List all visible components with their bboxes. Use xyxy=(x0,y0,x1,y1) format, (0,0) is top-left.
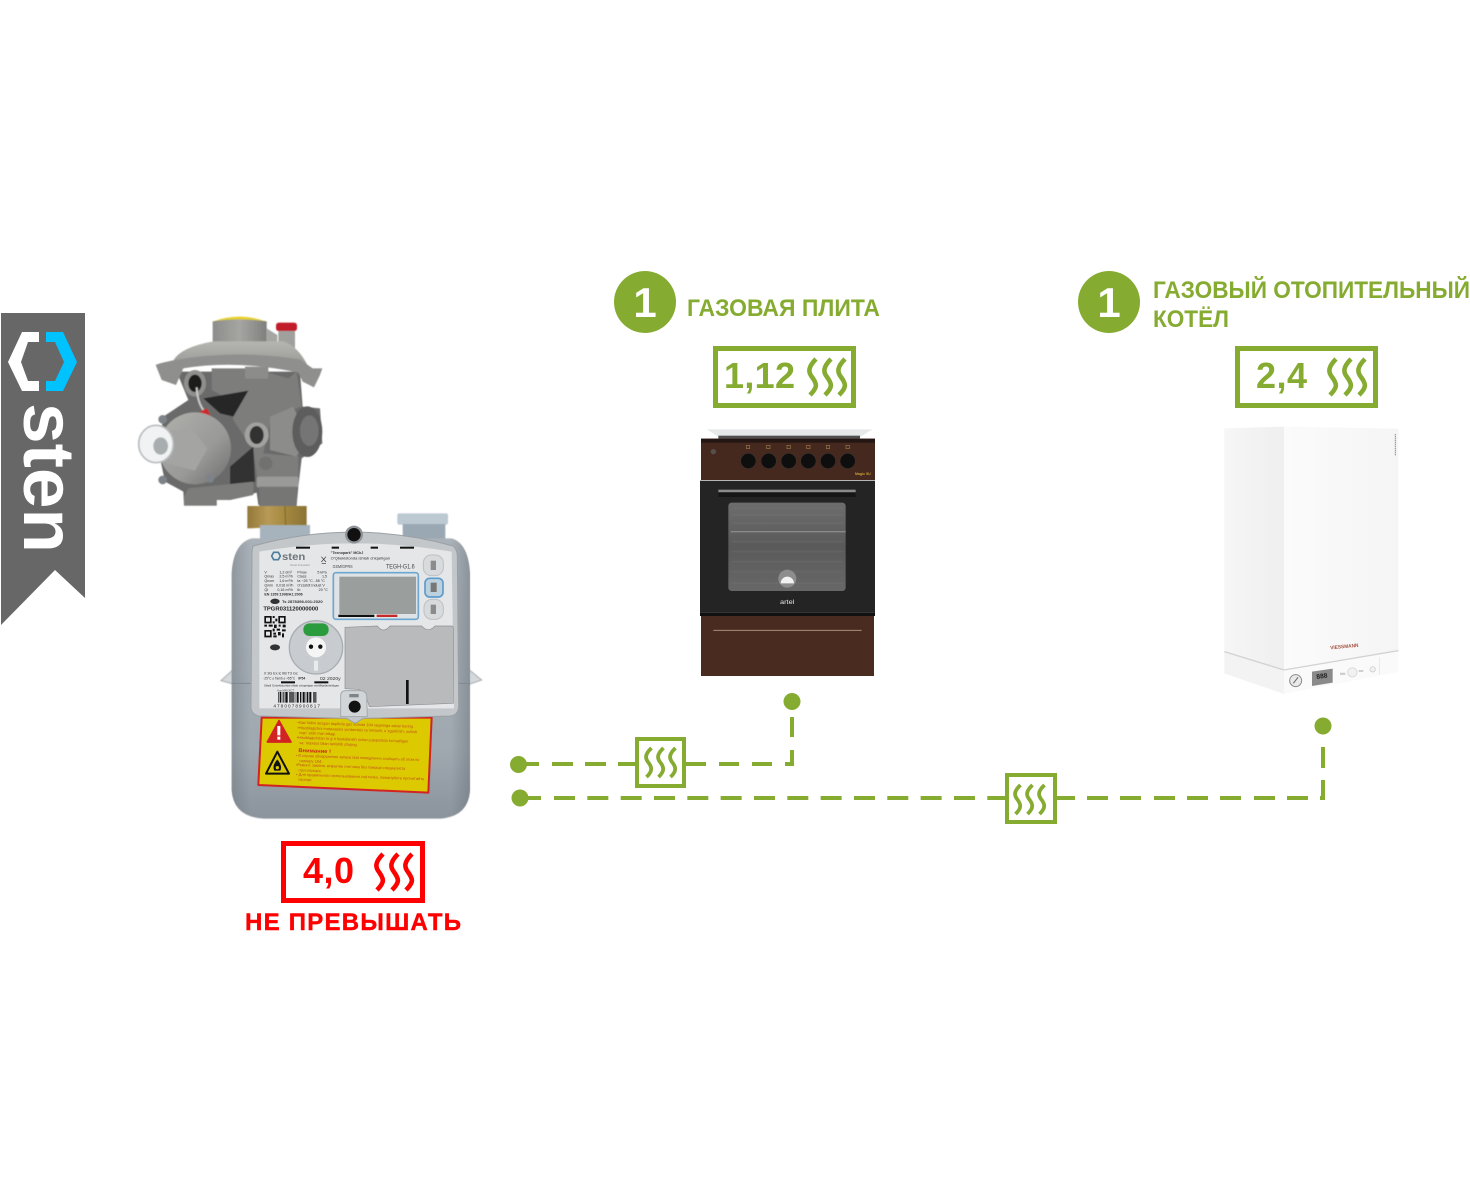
panel: sten mark and title xyxy=(272,551,415,571)
heading: cooker: ГАЗОВАЯ ПЛИТА xyxy=(687,295,880,322)
rating text xyxy=(263,672,341,692)
photo: smart gas meter xyxy=(221,513,482,819)
ribbon: sten logo xyxy=(1,313,88,625)
label text xyxy=(296,721,424,782)
warning caption: НЕ ПРЕВЫШАТЬ xyxy=(245,909,461,936)
barcode: 4780078900817 xyxy=(273,703,320,708)
panel: specification text: 2,5 m³/h xyxy=(279,575,293,579)
control panel xyxy=(701,439,875,480)
hob top xyxy=(707,429,873,437)
panel: specification text: 1,6 m³/h xyxy=(279,579,293,583)
meter: warning label xyxy=(258,718,432,793)
photo: gas pressure regulator xyxy=(139,317,322,528)
index disc xyxy=(289,621,343,674)
panel: specification text: Class xyxy=(297,575,307,579)
label text: строго запрещено. xyxy=(298,768,322,773)
oven door: artel xyxy=(780,600,794,606)
boiler control unit xyxy=(1224,651,1398,694)
badge: boiler quantity xyxy=(1078,271,1140,333)
meter: body shell xyxy=(232,538,470,819)
panel: specification text: 1,2 dm³ xyxy=(279,570,293,574)
value box: cooker 1,12: 1,12 xyxy=(724,355,795,396)
label text: номеру 104. xyxy=(299,759,323,764)
panel: specification text: Qmin xyxy=(264,584,273,588)
drawer xyxy=(700,613,875,676)
panel: specification text: Ts 2878396-001:2020 xyxy=(282,600,323,604)
rating text: IP54 xyxy=(298,676,305,680)
label text: •Hisoblagichdan to`g`ri foydalanish uchun pasportida ko'rsatilgan xyxy=(297,736,408,744)
heading: boiler: КОТЁЛ xyxy=(1153,306,1229,333)
oven door xyxy=(700,481,875,613)
barcode xyxy=(273,697,320,708)
badge: cooker quantity xyxy=(614,271,676,333)
boiler control unit: 888 xyxy=(1316,672,1328,681)
photo: wall-mounted gas boiler xyxy=(1224,427,1398,694)
label text: va `maxsus bilan tanishib chiqing. xyxy=(299,741,358,747)
QR code xyxy=(264,616,286,637)
panel: specification text: Qt xyxy=(264,588,268,592)
rating text: Sifatli Ozbekistonda ishlab chiqarilgan sertifikatlashtirilgan xyxy=(264,684,339,688)
label text: •Ремонт, замена, вскрытие счетчика без помощи специалиста xyxy=(296,763,406,771)
label text: • Для правильного использования счётчика, пожалуйста прочитайте xyxy=(296,773,424,781)
panel: sten mark and title: TEGH-G1.6 xyxy=(386,565,415,571)
logo mark: right blue bracket xyxy=(46,332,77,391)
photo: gas cooker xyxy=(700,429,875,676)
value box: cooker 1,12 xyxy=(716,348,854,406)
label text: man` etish man etilagi. xyxy=(299,731,336,736)
pipe: boiler branch xyxy=(512,718,1332,806)
label text: Внимание ! xyxy=(298,748,331,755)
label text: •Hisoblagichni mutaxassis yordamisiz ta`mirlash, o`zgartirish, ochish xyxy=(297,726,417,734)
heading: boiler xyxy=(1153,276,1470,333)
control panel: Magic 5U xyxy=(855,472,871,476)
logo wordmark: sten xyxy=(8,403,88,553)
panel: sten mark and title: "Texnopark" MChJ xyxy=(331,551,363,555)
panel: specification text: 20 °C xyxy=(319,588,328,592)
panel: specification text: tb xyxy=(297,588,300,592)
buttons xyxy=(423,555,443,619)
meter: front panel: TPGR031120000000 xyxy=(263,607,318,613)
panel: specification text: Qmax xyxy=(264,575,274,579)
label text: •Gaz hidini sezgan taqdirda gaz xizmati 104 raqamiga xabar bering. xyxy=(297,721,414,729)
panel: specification text: 0,016 m³/h xyxy=(276,584,293,588)
panel: specification text: Qnom xyxy=(264,579,274,583)
panel: specification text: 0,16 m³/h xyxy=(277,588,293,592)
warning triangle xyxy=(267,721,291,742)
grey cover xyxy=(345,626,453,707)
boiler side xyxy=(1224,427,1284,669)
blue LCD frame xyxy=(333,573,418,619)
pipe: cooker branch xyxy=(510,693,800,773)
panel: sten mark and title: GSM/GPRS xyxy=(333,564,353,569)
panel: sten mark and title: O'Qbekistonda ishlab chiqarilgan xyxy=(331,556,390,560)
badge: cooker quantity: 1 xyxy=(633,279,657,326)
flammable triangle xyxy=(266,752,289,774)
panel: specification text xyxy=(264,570,328,604)
icon: heat exchanger on cooker branch xyxy=(637,739,684,786)
panel: specification text: Pmax xyxy=(297,570,307,574)
logo mark: left white bracket xyxy=(8,332,39,391)
panel: sten mark and title: Smart Innovation xyxy=(290,563,311,567)
panel: specification text: ta −25 °C...55 °C xyxy=(297,579,325,583)
meter: top connectors xyxy=(221,513,482,684)
boiler brand: VIESSMANN xyxy=(1330,643,1359,651)
value box: boiler 2,4: 2,4 xyxy=(1256,355,1307,396)
rating text: Kop MXICXCT xyxy=(277,688,294,692)
panel: sten mark and title: sten xyxy=(282,552,305,563)
rating text: -25°C ≤ Tamb ≤ +55°C xyxy=(263,676,296,680)
rating text: II 3G Ex ic IIB T3 Gc xyxy=(264,672,298,676)
meter: front panel xyxy=(251,526,459,723)
value box: meter limit 4,0: 4,0 xyxy=(303,850,354,891)
label text: • В случае обнаружения запаха газа немедленно сообщить об этом по xyxy=(296,754,419,762)
badge: boiler quantity: 1 xyxy=(1097,279,1121,326)
panel: specification text: 1,5 xyxy=(322,575,327,579)
boiler front xyxy=(1284,427,1398,669)
value box: boiler 2,4 xyxy=(1238,348,1376,406)
value box: meter limit 4,0 xyxy=(284,844,422,900)
rating text: 02 2020y xyxy=(320,676,341,682)
panel: specification text: EN 1359:1998/A1:2006 xyxy=(264,593,303,597)
panel: specification text: 5 kPa xyxy=(317,570,328,574)
panel: specification text: O'zsstdt Indust V xyxy=(297,584,325,588)
icon: heat exchanger on boiler branch xyxy=(1007,775,1055,822)
screw block xyxy=(341,691,367,717)
label text: паспорт. xyxy=(298,778,312,782)
panel: specification text: V xyxy=(264,570,267,574)
